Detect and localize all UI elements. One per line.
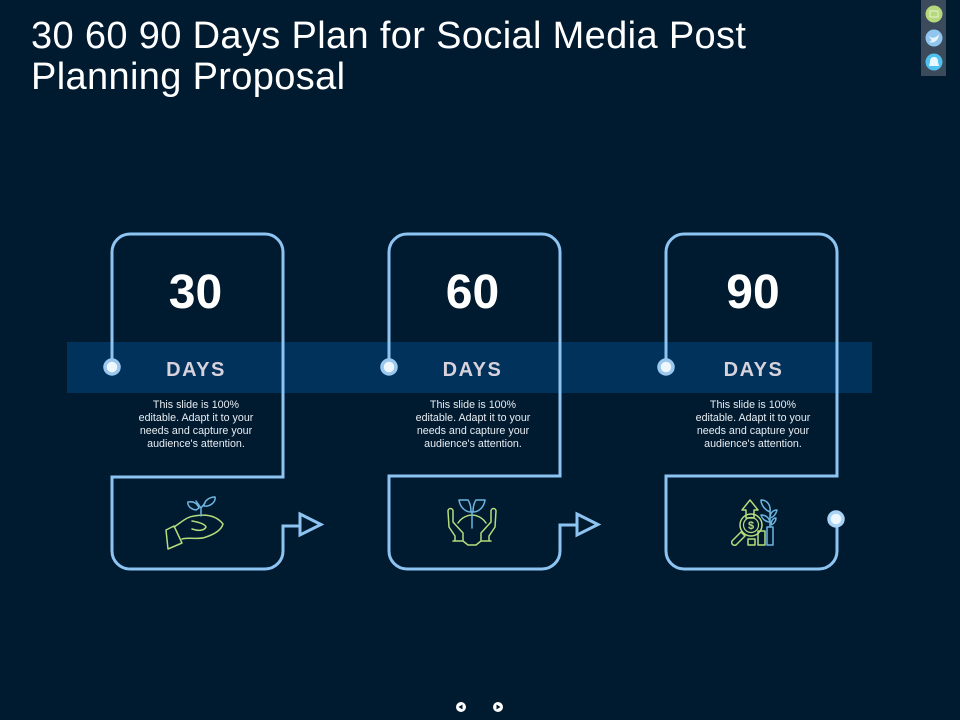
text block: 60 days: This slide is 100% bbox=[430, 399, 516, 411]
text block: 60 days: needs and capture your bbox=[417, 425, 529, 437]
label: days 30: DAYS bbox=[166, 359, 226, 381]
timeline band bbox=[67, 342, 872, 393]
card outline: 90 days bbox=[666, 234, 837, 569]
card outline: 60 days bbox=[389, 234, 577, 569]
icon: hand with sprout bbox=[166, 497, 223, 549]
nav button: next bbox=[493, 702, 503, 712]
title: 30 60 90 Days Plan for Social Media Post bbox=[31, 15, 746, 57]
text block: 30 days bbox=[139, 399, 254, 450]
node: 60 days bbox=[382, 360, 396, 374]
icon: growth with magnifier bbox=[732, 500, 777, 545]
node: 30 days bbox=[105, 360, 119, 374]
icon: dollar sign: $ bbox=[748, 520, 754, 532]
text block: 60 days: editable. Adapt it to your bbox=[416, 412, 530, 424]
text block: 90 days: This slide is 100% bbox=[710, 399, 796, 411]
card outline: 30 days bbox=[112, 234, 300, 569]
title bbox=[31, 15, 746, 98]
text block: 30 days: audience's attention. bbox=[147, 438, 245, 450]
text block: 90 days: editable. Adapt it to your bbox=[696, 412, 810, 424]
text block: 30 days: This slide is 100% bbox=[153, 399, 239, 411]
number: 30: 30 bbox=[169, 266, 222, 319]
arrow: 30 to 60 bbox=[300, 514, 321, 535]
end node bbox=[829, 512, 843, 526]
title: Planning Proposal bbox=[31, 56, 345, 98]
nav button: previous bbox=[456, 702, 466, 712]
icon: hands with plant bbox=[448, 500, 496, 545]
text block: 30 days: editable. Adapt it to your bbox=[139, 412, 253, 424]
text block: 60 days bbox=[416, 399, 530, 450]
label: days 60: DAYS bbox=[443, 359, 502, 381]
text block: 90 days: audience's attention. bbox=[704, 438, 802, 450]
label: days 90: DAYS bbox=[724, 359, 783, 381]
icon: twitter bbox=[926, 30, 942, 46]
icon: message bbox=[926, 6, 942, 22]
text block: 90 days: needs and capture your bbox=[697, 425, 809, 437]
text block: 90 days bbox=[696, 399, 810, 450]
number: 60: 60 bbox=[446, 266, 499, 319]
social sidebar bbox=[921, 0, 946, 76]
icon: snapchat bbox=[926, 54, 942, 70]
text block: 60 days: audience's attention. bbox=[424, 438, 522, 450]
text block: 30 days: needs and capture your bbox=[140, 425, 252, 437]
number: 90: 90 bbox=[726, 266, 780, 319]
arrow: 60 to 90 bbox=[577, 514, 598, 535]
node: 90 days bbox=[659, 360, 673, 374]
